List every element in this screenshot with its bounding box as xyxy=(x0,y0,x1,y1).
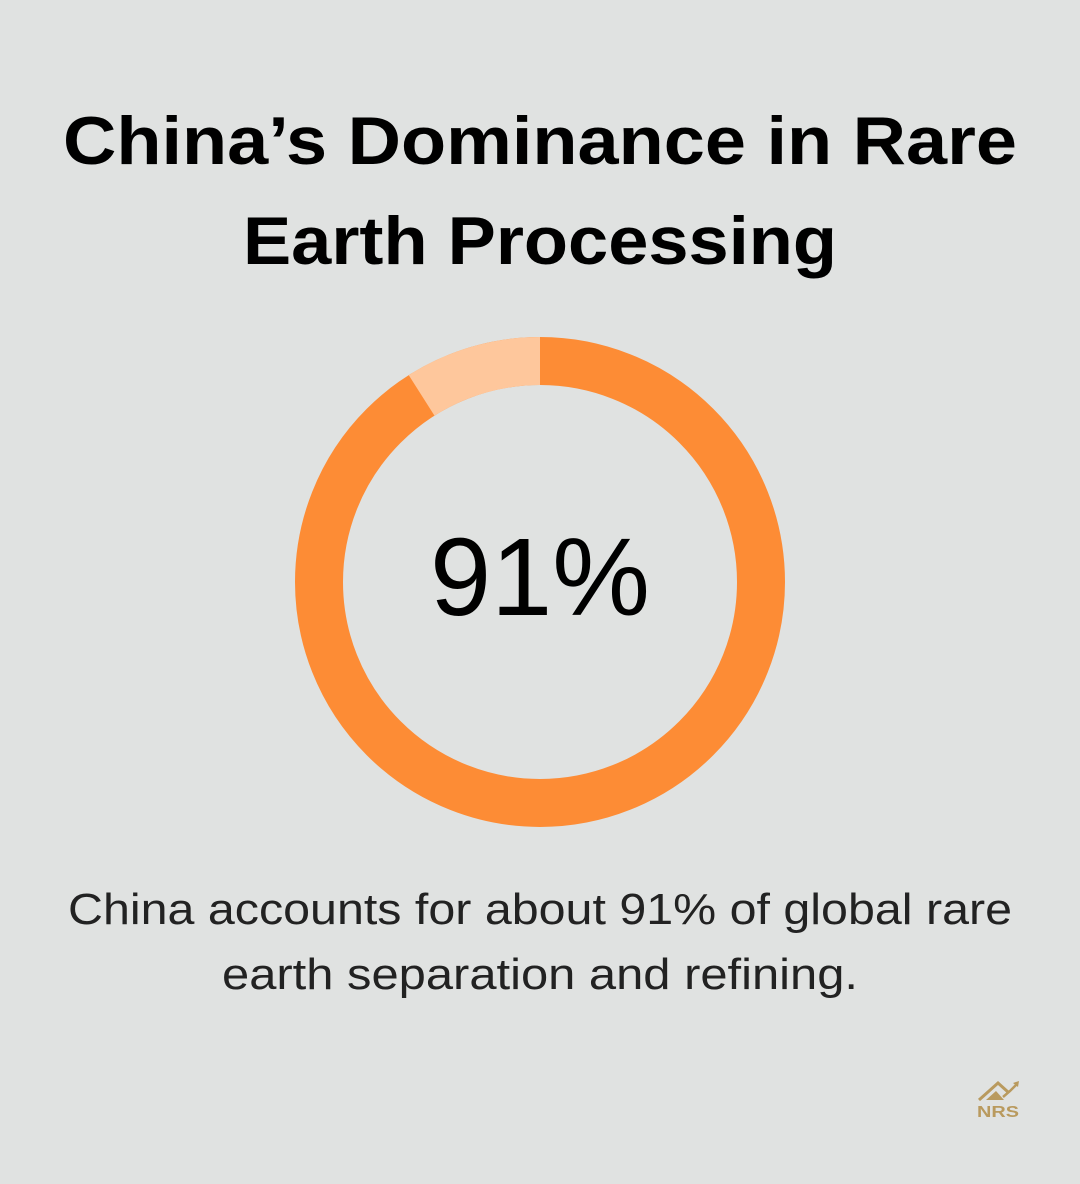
logo: NRS: NRS xyxy=(977,1104,1019,1121)
donut chart xyxy=(319,361,761,803)
logo: NRS xyxy=(977,1081,1019,1121)
description text: China accounts for about 91% of global rare xyxy=(68,885,1012,934)
description text: earth separation and refining. xyxy=(222,950,858,999)
title xyxy=(63,103,1017,279)
description text xyxy=(68,885,1012,999)
center value: 91% xyxy=(430,516,650,639)
title: Earth Processing xyxy=(243,203,837,279)
title: China’s Dominance in Rare xyxy=(63,103,1017,179)
